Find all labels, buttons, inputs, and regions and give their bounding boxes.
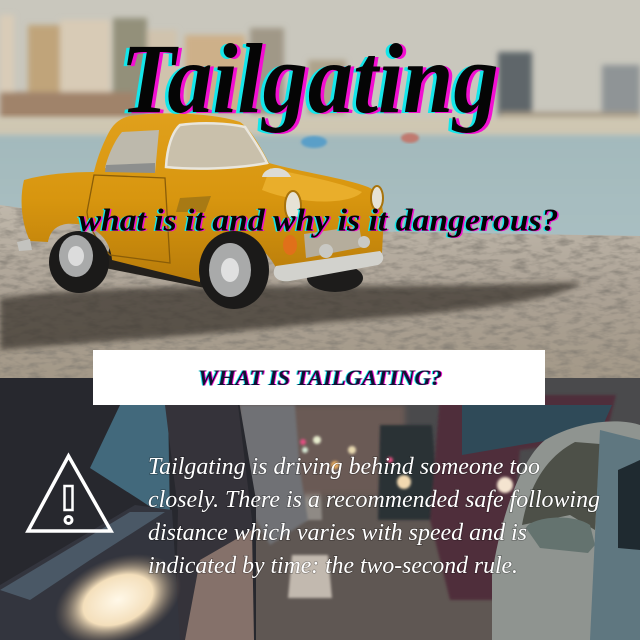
- front wheel: [199, 231, 269, 309]
- door outline: [87, 175, 170, 263]
- icon: yellow toy car: [17, 113, 383, 309]
- windshield: [166, 123, 267, 169]
- car body: [22, 113, 383, 282]
- ground: [0, 205, 640, 380]
- icon: warning triangle: [28, 456, 111, 531]
- boats: [301, 136, 327, 148]
- grille: [304, 226, 363, 258]
- headlights: [285, 191, 301, 221]
- heading: what is tailgating: WHAT IS TAILGATING?: [199, 365, 443, 390]
- heading: what is tailgating: WHAT IS TAILGATING?: [198, 365, 442, 390]
- text block: definition of tailgating: indicated by time: the two-second rule.: [148, 553, 518, 579]
- side window: [105, 130, 159, 173]
- far wheel: [307, 264, 363, 292]
- road: [250, 490, 500, 640]
- bumper: [274, 251, 383, 281]
- text block: definition of tailgating: [148, 454, 600, 579]
- text block: definition of tailgating: distance which varies with speed and is: [148, 520, 527, 546]
- left car: [0, 378, 256, 640]
- subtitle: what is it and why is it dangerous?: [80, 202, 560, 238]
- shadow: [0, 282, 582, 350]
- vent: [176, 196, 211, 212]
- title: Tailgating: [117, 24, 495, 135]
- text block: definition of tailgating: closely. There is a recommended safe following: [148, 487, 600, 513]
- distant buildings and lights: [235, 405, 405, 495]
- heading: what is tailgating: WHAT IS TAILGATING?: [197, 365, 441, 390]
- panel: top photo of toy car by the water: [0, 0, 640, 380]
- title: Tailgating: [124, 24, 502, 135]
- panel: bottom photo of traffic jam: [0, 378, 640, 640]
- blurred city skyline: [0, 15, 640, 127]
- underbody: [105, 245, 205, 288]
- blurred lights: [300, 436, 513, 493]
- hood highlight: [262, 168, 362, 202]
- white heading band: [93, 350, 545, 405]
- subtitle: what is it and why is it dangerous?: [77, 202, 557, 238]
- text block: definition of tailgating: Tailgating is driving behind someone too: [148, 454, 540, 480]
- water: [0, 135, 640, 245]
- hood ornament: [262, 168, 291, 177]
- title: Tailgating: [120, 23, 498, 134]
- headlight: [41, 536, 195, 640]
- far cars: [240, 405, 308, 545]
- right car: [492, 421, 640, 640]
- subtitle: what is it and why is it dangerous?: [78, 202, 558, 238]
- rear wheel: [49, 231, 109, 293]
